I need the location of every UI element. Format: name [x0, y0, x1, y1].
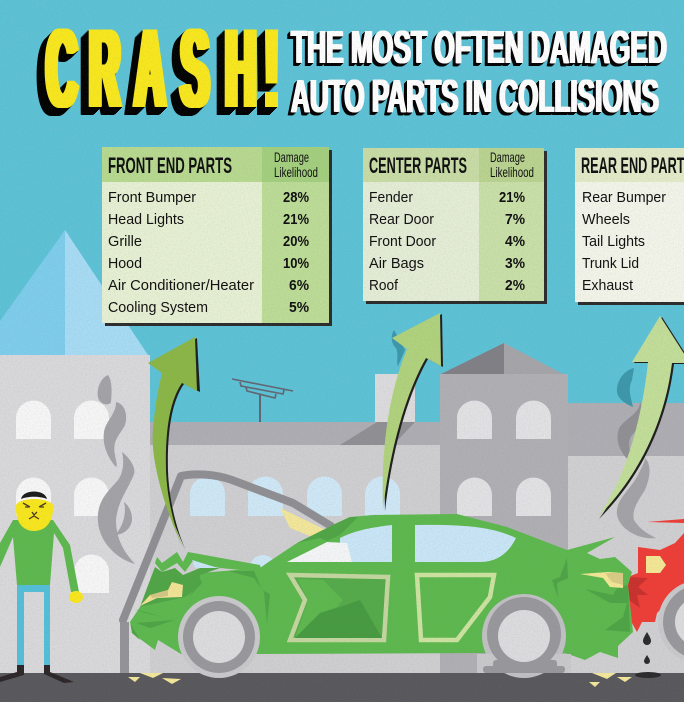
- rows: 4%: [505, 233, 525, 250]
- column heading: Likelihood: [490, 164, 534, 180]
- rows: Air Bags: [369, 256, 424, 272]
- broken hood frame: [120, 474, 332, 673]
- column heading: [274, 149, 318, 180]
- engine bay: [140, 567, 220, 607]
- arrow: front end parts: [148, 337, 200, 551]
- rows: Grille: [108, 234, 142, 250]
- debris: [128, 673, 632, 687]
- car body: [130, 514, 633, 660]
- rows: Hood: [108, 256, 142, 272]
- arrow: rear end parts: [597, 316, 684, 519]
- rows: 5%: [289, 299, 309, 316]
- white building: [0, 355, 150, 673]
- title: CRASH!: CRASH!: [43, 5, 275, 131]
- heading: CENTER PARTS: [369, 153, 467, 178]
- rows: 21%: [283, 211, 309, 228]
- right building: [568, 403, 684, 673]
- rows: Trunk Lid: [582, 256, 639, 272]
- antenna: [232, 379, 293, 422]
- rear door: [417, 575, 494, 640]
- rows: 3%: [505, 255, 525, 272]
- rows: 6%: [289, 277, 309, 294]
- panel: rear end parts: [575, 148, 684, 305]
- blue pyramid roof: [0, 230, 150, 358]
- column heading: Damage: [274, 149, 309, 165]
- rows: Wheels: [582, 212, 630, 228]
- windshield sliver: [192, 560, 218, 568]
- rows: Roof: [369, 278, 399, 294]
- rows: Exhaust: [582, 278, 633, 294]
- front door: [290, 575, 388, 640]
- oil drips: [635, 632, 661, 678]
- chimney: [375, 374, 415, 424]
- rows: Front Bumper: [108, 190, 196, 206]
- shoes: [0, 665, 74, 683]
- rows: Fender: [369, 190, 413, 206]
- tail light: [580, 572, 623, 588]
- panel: center parts: [363, 148, 547, 304]
- headlight: [140, 582, 183, 606]
- rows: [369, 189, 525, 294]
- road: [0, 673, 684, 702]
- small teal smoke behind center arrow: [392, 330, 405, 366]
- column heading: Likelihood: [274, 164, 318, 180]
- middle long building: [150, 422, 442, 673]
- hood strip: [155, 552, 262, 572]
- panel: front end parts: [102, 147, 332, 326]
- smoke: left: [98, 375, 135, 564]
- rows: 7%: [505, 211, 525, 228]
- rows: [582, 190, 666, 294]
- rear flat wheel: [477, 594, 571, 678]
- green car: [130, 514, 633, 678]
- hair: [21, 492, 47, 499]
- hand: [69, 591, 83, 603]
- front wheel: [178, 596, 260, 678]
- man: [0, 492, 83, 683]
- subtitle: [290, 21, 666, 122]
- smoke: right: [617, 368, 656, 538]
- rows: Head Lights: [108, 212, 184, 228]
- rows: [108, 189, 309, 316]
- face: [23, 503, 46, 519]
- sweater: [0, 520, 79, 592]
- rows: 2%: [505, 277, 525, 294]
- rows: 20%: [283, 233, 309, 250]
- windows: [287, 517, 516, 562]
- head: [16, 499, 53, 531]
- legs: [17, 585, 50, 665]
- grey tower: [440, 343, 568, 673]
- rows: Tail Lights: [582, 234, 645, 250]
- red car: [628, 519, 684, 664]
- creases: [131, 558, 630, 640]
- column heading: [490, 149, 534, 180]
- rows: Rear Door: [369, 212, 434, 228]
- rows: 28%: [283, 189, 309, 206]
- arrow: center parts: [383, 313, 443, 511]
- rows: 10%: [283, 255, 309, 272]
- rows: Front Door: [369, 234, 436, 250]
- rows: Air Conditioner/Heater: [108, 278, 254, 294]
- heading: FRONT END PARTS: [108, 153, 232, 178]
- rows: Rear Bumper: [582, 190, 666, 206]
- rows: 21%: [499, 189, 525, 206]
- rows: Cooling System: [108, 300, 208, 316]
- column heading: Damage: [490, 149, 525, 165]
